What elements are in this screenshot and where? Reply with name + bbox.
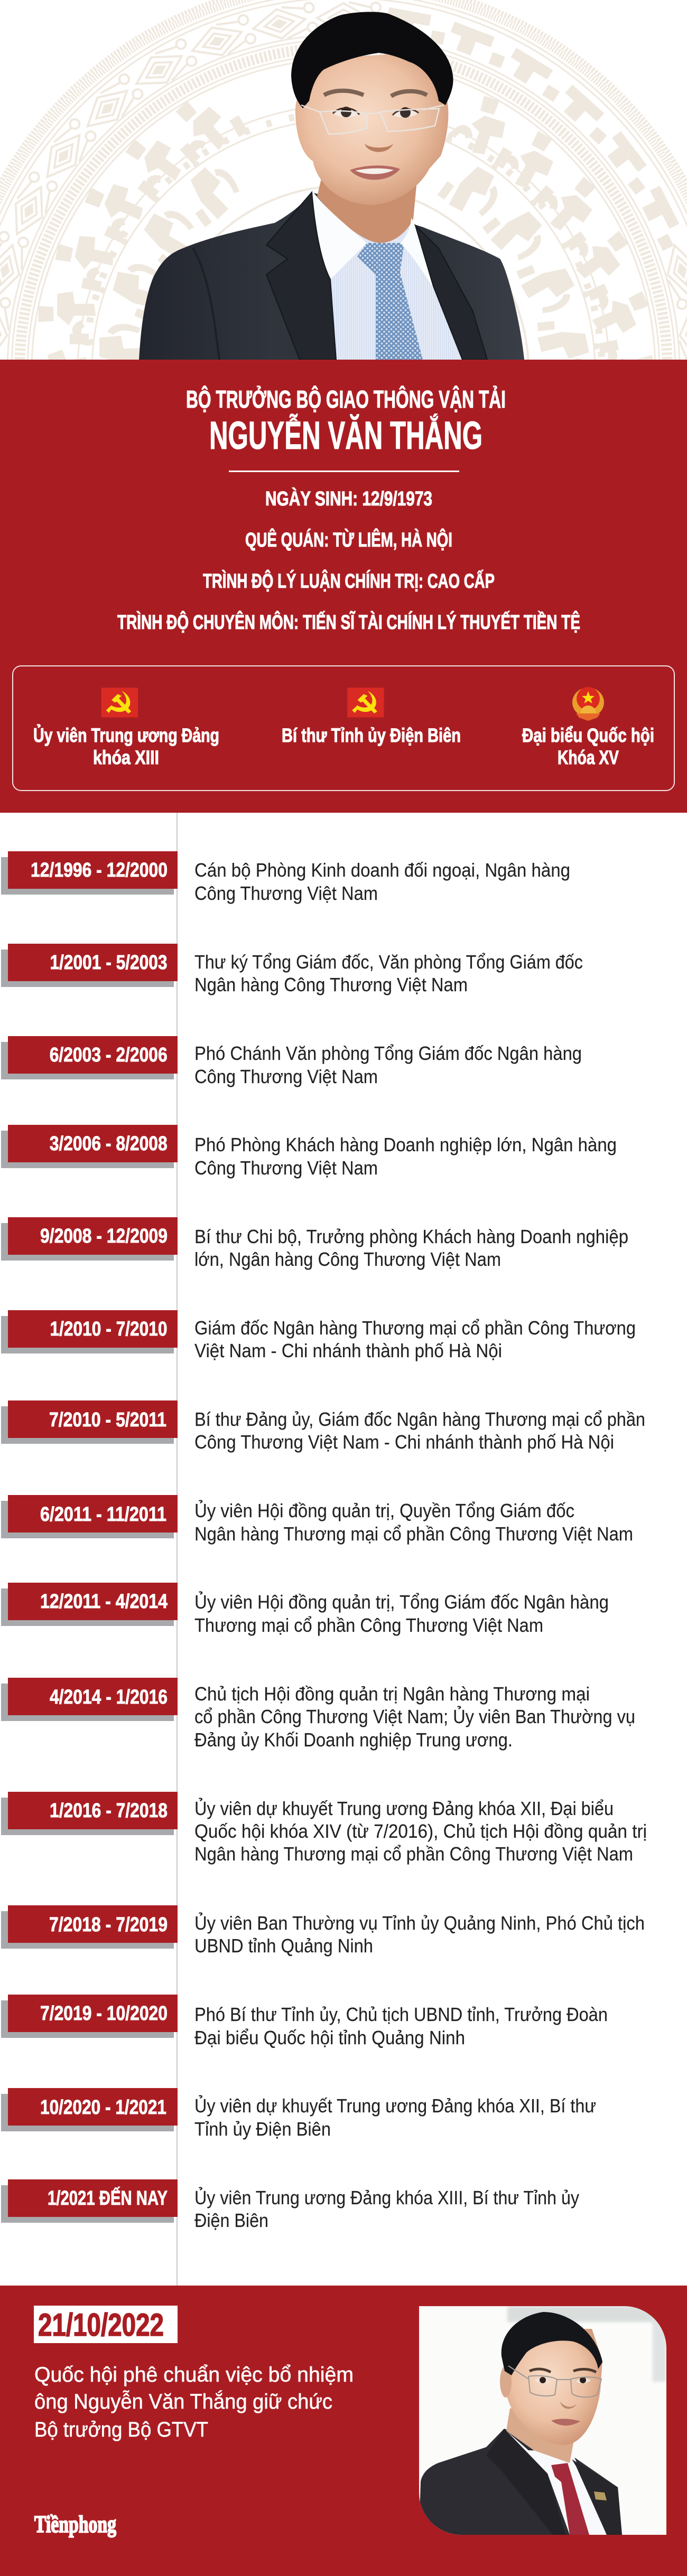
- main portrait illustration: [139, 12, 524, 360]
- timeline entry 11: Ủy viên dự khuyết Trung ương Đảng khóa XII, Đại biểu: [194, 1797, 614, 1819]
- jacket: [419, 2429, 622, 2535]
- right lapel: [572, 2459, 622, 2535]
- timeline entry 1: [1, 851, 570, 904]
- panel: roles: [13, 666, 674, 791]
- timeline entry 6: [1, 1310, 636, 1361]
- timeline entry 11: 1/2016 - 7/2018: [50, 1800, 168, 1822]
- timeline entry 2: Ngân hàng Công Thương Việt Nam: [194, 974, 468, 995]
- timeline entry 13: Đại biểu Quốc hội tỉnh Quảng Ninh: [194, 2027, 465, 2048]
- panel: appointment footer: [0, 2286, 687, 2576]
- timeline axis: [177, 813, 178, 2286]
- eyes: [333, 107, 419, 118]
- timeline entry 12: UBND tỉnh Quảng Ninh: [194, 1935, 373, 1957]
- neck: [506, 2408, 576, 2463]
- timeline entry 2: [1, 944, 583, 995]
- appointment text: [34, 2363, 354, 2441]
- timeline entry 15: 1/2021 ĐẾN NAY: [48, 2186, 168, 2210]
- timeline entry 5: lớn, Ngân hàng Công Thương Việt Nam: [194, 1248, 501, 1270]
- role: national assembly deputy: Đại biểu Quốc hội: [522, 725, 654, 746]
- timeline entry 9: [1, 1583, 609, 1636]
- icon: party flag 2: [347, 688, 384, 717]
- right lapel: [415, 225, 487, 360]
- timeline entry 4: [1, 1125, 617, 1179]
- timeline entry 10: Chủ tịch Hội đồng quản trị Ngân hàng Thương mại: [194, 1683, 590, 1705]
- timeline entry 6: 1/2010 - 7/2010: [50, 1318, 167, 1340]
- timeline entry 13: [1, 1995, 608, 2048]
- timeline entry 12: [1, 1905, 645, 1957]
- timeline entry 4: Phó Phòng Khách hàng Doanh nghiệp lớn, Ngân hàng: [194, 1134, 617, 1155]
- timeline entry 10: cổ phần Công Thương Việt Nam; Ủy viên Ban Thường vụ: [194, 1705, 635, 1727]
- footer background: [0, 2286, 687, 2576]
- second portrait photo: [419, 2306, 666, 2535]
- timeline entry 8: Ủy viên Hội đồng quản trị, Quyền Tổng Giám đốc: [194, 1499, 574, 1521]
- tie: [357, 243, 423, 360]
- timeline entry 11: Ngân hàng Thương mại cổ phần Công Thương Việt Nam: [194, 1843, 633, 1865]
- timeline entry 3: [1, 1036, 582, 1087]
- hair: [502, 2312, 602, 2375]
- eyebrows: [324, 91, 427, 96]
- appointment text: Bộ trưởng Bộ GTVT: [34, 2418, 208, 2441]
- timeline entry 11: [1, 1792, 647, 1865]
- timeline entry 2: Thư ký Tổng Giám đốc, Văn phòng Tổng Giám đốc: [194, 951, 583, 973]
- hair: [291, 12, 453, 108]
- timeline entry 15: [1, 2179, 579, 2231]
- nose: [365, 144, 393, 152]
- left lapel: [266, 192, 336, 360]
- person name: NGUYỄN VĂN THẮNG: [209, 413, 482, 457]
- timeline entry 9: 12/2011 - 4/2014: [40, 1591, 168, 1613]
- timeline entry 7: 7/2010 - 5/2011: [49, 1409, 166, 1431]
- timeline entry 13: 7/2019 - 10/2020: [40, 2002, 168, 2025]
- timeline entry 8: 6/2011 - 11/2011: [40, 1503, 166, 1526]
- home town: QUÊ QUÁN: TỪ LIÊM, HÀ NỘI: [245, 528, 452, 551]
- logo: Tiền phong: Tiềnphong: [34, 2511, 116, 2537]
- timeline entry 10: [1, 1678, 635, 1751]
- timeline entry 5: 9/2008 - 12/2009: [40, 1225, 168, 1247]
- role: central committee: Ủy viên Trung ương Đảng: [33, 724, 219, 746]
- icon: party flag 1: [101, 688, 138, 717]
- timeline entry 1: Cán bộ Phòng Kinh doanh đối ngoại, Ngân hàng: [194, 859, 570, 881]
- timeline entry 12: 7/2018 - 7/2019: [49, 1914, 168, 1936]
- timeline entry 11: Quốc hội khóa XIV (từ 7/2016), Chủ tịch Hội đồng quản trị: [194, 1820, 647, 1842]
- timeline entry 7: Công Thương Việt Nam - Chi nhánh thành phố Hà Nội: [194, 1431, 614, 1453]
- date badge: 21/10/2022: [38, 2307, 164, 2343]
- role: national assembly deputy: Khóa XV: [558, 747, 619, 768]
- political level: TRÌNH ĐỘ LÝ LUẬN CHÍNH TRỊ: CAO CẤP: [203, 569, 495, 593]
- appointment text: Quốc hội phê chuẩn việc bổ nhiệm: [34, 2363, 354, 2386]
- timeline entry 7: [1, 1400, 645, 1453]
- timeline entry 10: Đảng ủy Khối Doanh nghiệp Trung ương.: [194, 1729, 513, 1751]
- timeline entry 6: Giám đốc Ngân hàng Thương mại cổ phần Công Thương: [194, 1317, 636, 1339]
- timeline entry 9: Ủy viên Hội đồng quản trị, Tổng Giám đốc Ngân hàng: [194, 1591, 609, 1613]
- glasses: [508, 2366, 601, 2397]
- timeline entry 6: Việt Nam - Chi nhánh thành phố Hà Nội: [194, 1340, 502, 1361]
- teeth: [355, 168, 394, 174]
- timeline entry 2: 1/2001 - 5/2003: [50, 952, 167, 974]
- icon: national emblem: [572, 687, 604, 721]
- mouth: [350, 165, 400, 180]
- ear: [500, 2366, 512, 2398]
- heading: [186, 386, 506, 457]
- timeline entry 1: 12/1996 - 12/2000: [31, 859, 168, 881]
- timeline entry 15: Điện Biên: [194, 2210, 268, 2231]
- glasses: [301, 105, 444, 134]
- timeline entry 10: 4/2014 - 1/2016: [50, 1686, 168, 1708]
- eyes: [535, 2377, 591, 2383]
- face: [295, 53, 448, 205]
- timeline entry 14: 10/2020 - 1/2021: [40, 2096, 166, 2119]
- date of birth: NGÀY SINH: 12/9/1973: [265, 487, 432, 510]
- timeline entry 14: Ủy viên dự khuyết Trung ương Đảng khóa XII, Bí thư: [194, 2094, 596, 2117]
- jacket: [139, 192, 524, 360]
- timeline entry 3: 6/2003 - 2/2006: [50, 1044, 168, 1066]
- role: national assembly deputy: [522, 725, 654, 768]
- shirt: [331, 224, 462, 360]
- timeline entry 15: Ủy viên Trung ương Đảng khóa XIII, Bí thư Tỉnh ủy: [194, 2186, 579, 2208]
- timeline entry 9: Thương mại cổ phần Công Thương Việt Nam: [194, 1614, 543, 1636]
- appointment text: ông Nguyễn Văn Thắng giữ chức: [34, 2390, 332, 2413]
- timeline entry 8: Ngân hàng Thương mại cổ phần Công Thương Việt Nam: [194, 1523, 633, 1545]
- timeline entry 5: Bí thư Chi bộ, Trưởng phòng Khách hàng Doanh nghiệp: [194, 1226, 628, 1247]
- pin: [594, 2492, 607, 2500]
- timeline entry 3: Phó Chánh Văn phòng Tổng Giám đốc Ngân hàng: [194, 1042, 582, 1064]
- timeline entry 3: Công Thương Việt Nam: [194, 1066, 378, 1087]
- shirt: [506, 2431, 607, 2535]
- face: [504, 2329, 602, 2445]
- position title: BỘ TRƯỞNG BỘ GIAO THÔNG VẬN TẢI: [186, 386, 506, 413]
- jacket sleeve seam: [193, 248, 219, 360]
- timeline entry 7: Bí thư Đảng ủy, Giám đốc Ngân hàng Thương mại cổ phần: [194, 1408, 645, 1430]
- timeline entry 8: [1, 1495, 633, 1545]
- timeline entry 14: [1, 2088, 596, 2140]
- timeline entry 13: Phó Bí thư Tỉnh ủy, Chủ tịch UBND tỉnh, Trưởng Đoàn: [194, 2004, 608, 2025]
- role: provincial party secretary: Bí thư Tỉnh ủy Điện Biên: [282, 725, 461, 746]
- timeline entry 5: [1, 1217, 628, 1270]
- red profile panel: [0, 360, 687, 813]
- tie: [551, 2463, 589, 2535]
- eyebrows: [530, 2369, 596, 2372]
- nose: [560, 2402, 577, 2409]
- left lapel: [486, 2429, 565, 2535]
- neck: [317, 174, 417, 243]
- decorative bronze drum pattern: [0, 0, 687, 360]
- timeline entry 1: Công Thương Việt Nam: [194, 882, 378, 904]
- timeline entry 14: Tỉnh ủy Điện Biên: [194, 2118, 331, 2140]
- role: central committee: khóa XIII: [93, 747, 159, 768]
- photo background blur: [507, 2306, 666, 2322]
- roles frame: [13, 666, 674, 791]
- timeline entry 4: 3/2006 - 8/2008: [50, 1133, 168, 1155]
- left collar: [312, 190, 367, 279]
- right collar: [401, 218, 433, 288]
- timeline entry 12: Ủy viên Ban Thường vụ Tỉnh ủy Quảng Ninh, Phó Chủ tịch: [194, 1912, 645, 1934]
- mouth: [551, 2419, 580, 2425]
- role: central committee: [33, 724, 219, 768]
- profile facts: [117, 487, 580, 634]
- timeline entry 4: Công Thương Việt Nam: [194, 1157, 378, 1179]
